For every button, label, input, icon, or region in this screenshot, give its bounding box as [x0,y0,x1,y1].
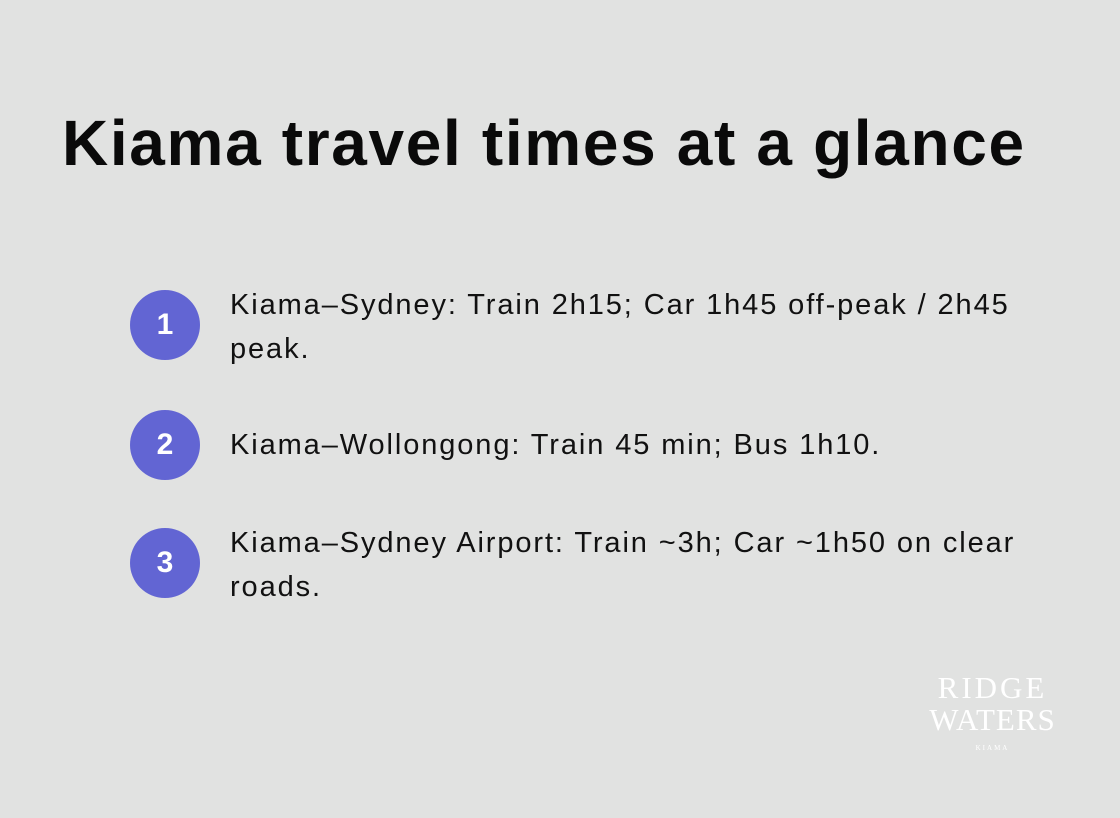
item 3 [130,527,1015,603]
badge 1: 1 [157,308,173,341]
logo [929,670,1056,752]
badge 2 [130,410,200,480]
badge 2: 2 [157,428,173,461]
badge 1 [130,290,200,360]
logo: WATERS [929,702,1056,737]
badge 3: 3 [157,546,173,579]
logo: KIAMA [976,744,1009,752]
title: Kiama travel times at a glance [62,107,1026,179]
item 1 [130,289,1010,365]
logo: RIDGE [938,670,1047,705]
item 2 [130,410,881,480]
text 3: Kiama–Sydney Airport: Train ~3h; Car ~1h50 on clear roads. [230,527,1015,603]
text 1: Kiama–Sydney: Train 2h15; Car 1h45 off-peak / 2h45 peak. [230,289,1010,365]
text 2: Kiama–Wollongong: Train 45 min; Bus 1h10. [230,429,881,461]
badge 3 [130,528,200,598]
